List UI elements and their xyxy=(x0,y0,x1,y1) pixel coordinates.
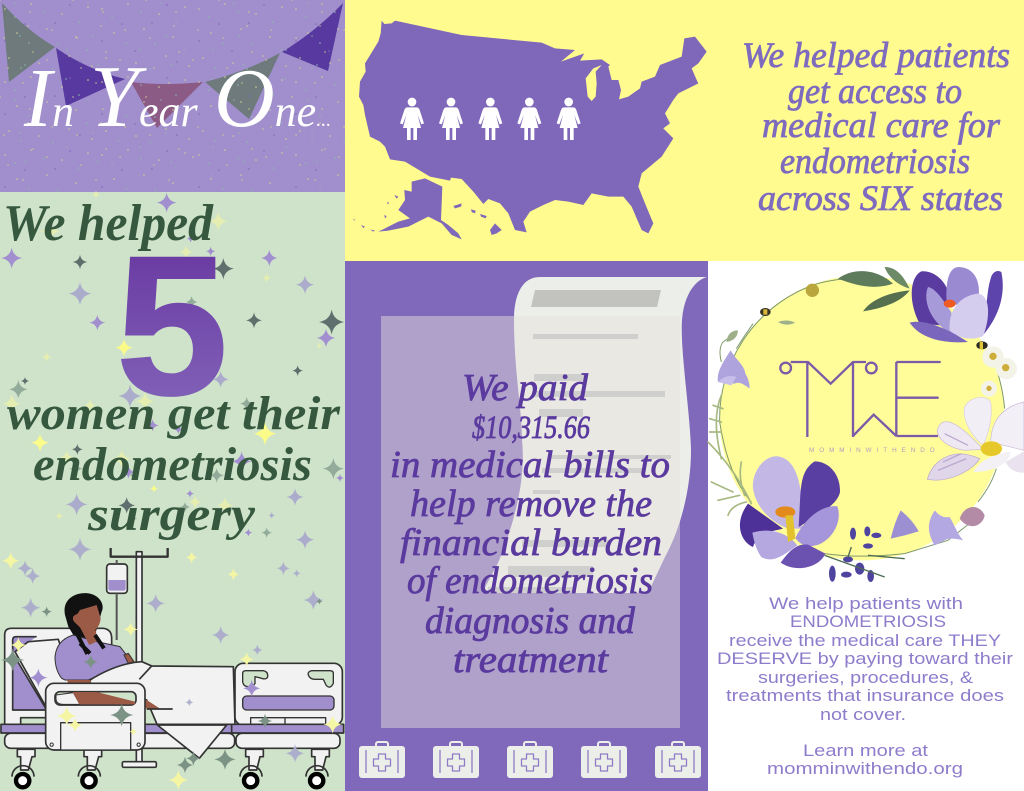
text: mission statement: ENDOMETRIOSIS xyxy=(790,613,946,631)
cosmos flower xyxy=(927,397,1024,480)
translucent text backing xyxy=(381,316,680,728)
text: access across six states: endometriosis xyxy=(780,141,970,181)
text: we paid medical bills: diagnosis and xyxy=(425,600,636,642)
text: we helped women get surgery: surgery xyxy=(87,488,256,541)
text: access across six states: medical care for xyxy=(762,105,1001,145)
bunting flags xyxy=(2,3,343,128)
number: 5: 5 xyxy=(116,215,228,436)
text: mission statement: momminwithendo.org xyxy=(767,760,963,778)
buds and bee xyxy=(760,284,988,349)
heading: in year one: n xyxy=(52,87,85,136)
text: we helped women get surgery xyxy=(3,195,341,541)
text: we helped women get surgery: endometriosis xyxy=(33,438,312,491)
text: access across six states xyxy=(742,35,1010,218)
text: mission statement: DESERVE by paying toward their xyxy=(717,650,1014,668)
text: we paid medical bills: We paid xyxy=(462,367,589,409)
panel: medical bills paid xyxy=(345,261,708,791)
decorative sparkles over the bed xyxy=(1,538,342,790)
icons: five women xyxy=(400,98,581,140)
panel: five women surgery xyxy=(0,191,345,791)
illustration: medical bill receipt xyxy=(482,277,707,593)
text: we paid medical bills: help remove the xyxy=(410,483,652,525)
text: we helped women get surgery: We helped xyxy=(3,195,214,252)
leaves xyxy=(726,267,910,342)
left grass xyxy=(708,395,751,515)
text: we paid medical bills xyxy=(390,367,670,681)
heading: in year one: Y xyxy=(90,49,147,146)
text: we paid medical bills: financial burden xyxy=(400,522,662,564)
text: access across six states: We helped patients xyxy=(742,35,1010,75)
decorative sparkles on green xyxy=(1,191,344,549)
heading: in year one: ne... xyxy=(275,87,331,136)
panel: mission and logo xyxy=(708,261,1024,791)
daisies xyxy=(981,346,1017,397)
icons: five medical kits xyxy=(359,742,701,778)
bottom bells and bud xyxy=(891,507,985,545)
illustration: patient in hospital bed xyxy=(1,548,344,787)
text: access across six states: get access to xyxy=(788,71,962,111)
logo: MWE monogram xyxy=(780,362,941,437)
text: mission statement: treatments that insurance does xyxy=(726,687,1004,705)
text: mission statement: not cover. xyxy=(820,706,906,724)
bottom purple buds xyxy=(825,526,905,582)
text: we paid medical bills: $10,315.66 xyxy=(472,410,590,446)
panel: in year one banner xyxy=(0,0,345,192)
text: mission statement: We help patients with xyxy=(769,595,963,613)
text: mission statement: receive the medical care THEY xyxy=(729,632,1001,650)
floral wreath xyxy=(708,267,1024,582)
bottom crocus xyxy=(740,456,840,568)
text: we helped women get surgery: women get their xyxy=(7,387,341,440)
top crocus xyxy=(910,267,1003,342)
text: mission statement xyxy=(717,595,1014,778)
text: mission statement: surgeries, procedures, & xyxy=(758,669,973,687)
receipt line items xyxy=(488,334,671,593)
heading: in year one: O xyxy=(214,52,275,145)
bell flower left xyxy=(718,350,750,389)
map of the united states xyxy=(353,21,707,239)
text: mission statement: Learn more at xyxy=(803,742,928,760)
text: access across six states: across SIX states xyxy=(758,178,1003,218)
logo caption: MOMMINWITHENDO xyxy=(809,447,935,454)
text: we paid medical bills: in medical bills to xyxy=(390,444,670,486)
panel: six states xyxy=(345,0,1024,261)
heading: in year one: ear xyxy=(139,87,209,136)
text: we paid medical bills: treatment xyxy=(453,639,610,681)
heading: in year one: I xyxy=(23,52,56,145)
text: we paid medical bills: of endometriosis xyxy=(407,560,653,602)
